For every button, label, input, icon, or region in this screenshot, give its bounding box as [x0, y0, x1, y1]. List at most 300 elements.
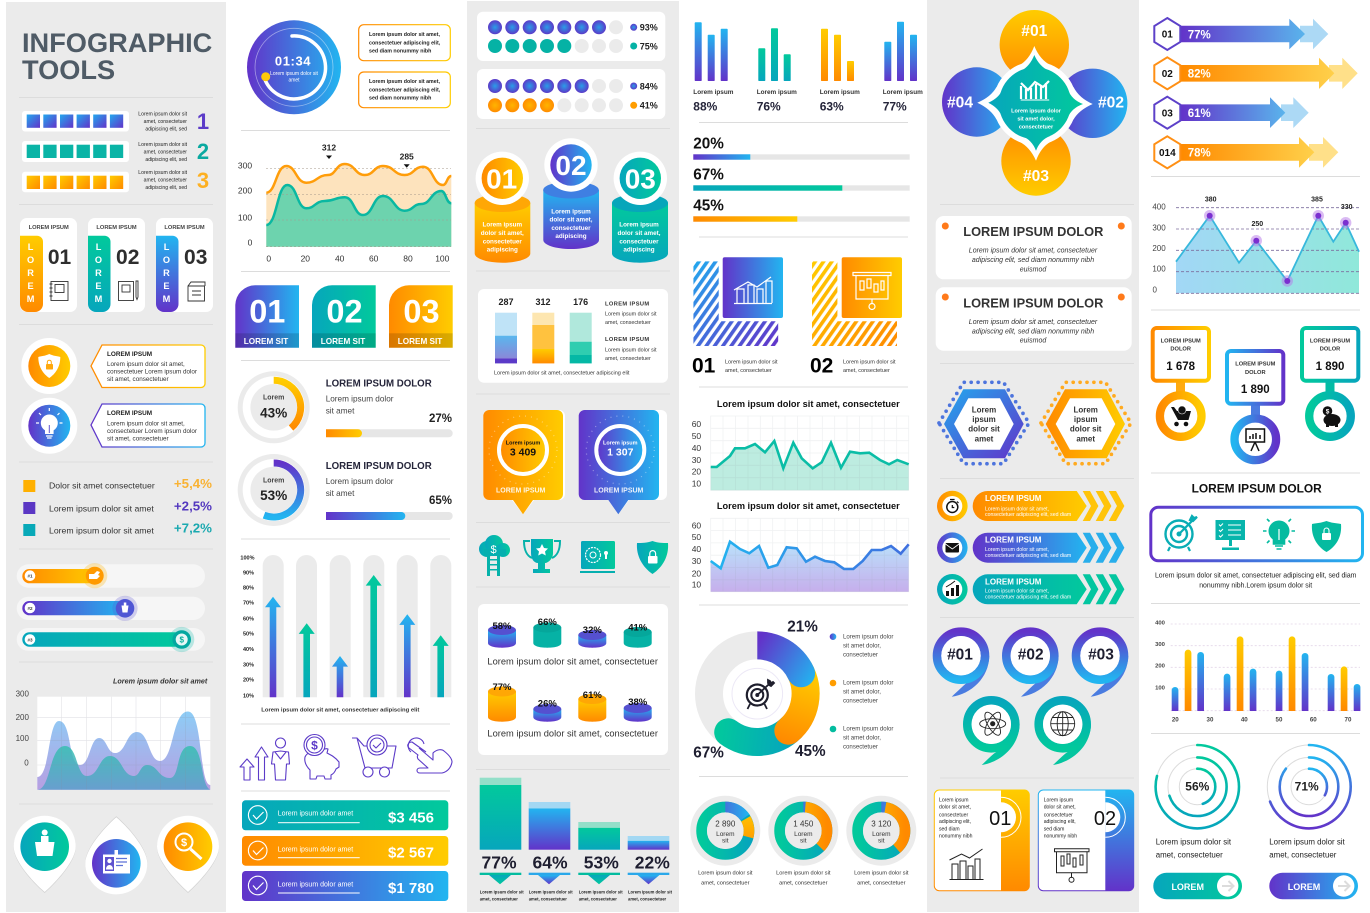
panel: numbered square rows: 3 [197, 168, 209, 193]
concentric progress 71%: 71% [1295, 779, 1319, 793]
panel: numbered square rows: Lorem ipsum dolor sit [138, 112, 188, 118]
line chart: teal: 30 [692, 455, 701, 465]
panel: LOREM cards: O [163, 255, 170, 265]
line area chart: orange and teal: 0 [248, 238, 253, 248]
pin icon: magnifier with dollar [157, 816, 219, 893]
panel: numbered square rows: 1 [197, 109, 209, 134]
progress ring 53% [238, 454, 310, 526]
panel: dot rating 84% 41%: 84% [640, 81, 658, 91]
slider bars: $ [179, 636, 184, 644]
panel: LOREM cards: R [163, 268, 170, 278]
panel: LOREM cards: M [27, 294, 35, 304]
arrow bar chart: 50% [243, 632, 254, 638]
mini bar set 76%: 76% [757, 99, 781, 113]
striped block 02: Lorem ipsum dolor sit [843, 360, 896, 366]
card: LOREM IPSUM DOLOR 1: euismod [1020, 266, 1047, 273]
panel: stacked bars 287 312 176 [478, 289, 668, 383]
icon strip panel [1151, 507, 1362, 561]
grouped bar chart: 400 [1155, 620, 1166, 626]
pin icon: id card [85, 816, 147, 894]
card: LOREM IPSUM DOLOR 1 [936, 216, 1132, 279]
bar chart 77 64 53 22: 22% [635, 852, 670, 872]
bar chart 77 64 53 22: 77% [481, 852, 517, 872]
arrow banner: teal [937, 574, 1124, 605]
callout: orange: Lorem ipsum dolor sit amet, [107, 361, 185, 368]
info card 02: Lorem ipsum [1044, 798, 1073, 804]
mini donut 1 450: Lorem ipsum dolor sit [776, 870, 831, 876]
pin box: 1 890 blue: DOLOR [1245, 370, 1266, 376]
concentric progress 71% [1267, 745, 1351, 860]
arrow banner: orange: Lorem ipsum dolor sit amet, [985, 506, 1049, 512]
badge: 1 307: Lorem ipsum [603, 441, 638, 447]
mini donut 2 890: amet, consectetuer [701, 880, 750, 886]
bar chart 77 64 53 22: Lorem ipsum dolor sit [628, 890, 673, 895]
grouped bar chart: 70 [1345, 716, 1352, 723]
caption text: nonummy nibh.Lorem ipsum dolor sit [1199, 583, 1312, 590]
arrow row 01 77%: 01 [1162, 30, 1173, 41]
arrow banner: blue: Lorem ipsum dolor sit amet, [985, 547, 1049, 553]
hexagon: blue: ipsum [972, 415, 996, 424]
badge: 3 409: LOREM IPSUM [496, 487, 546, 494]
donut chart with target icon: consectetuer [843, 698, 878, 705]
bar chart 77 64 53 22: amet, consectetuer [628, 896, 667, 901]
line chart: teal: Lorem ipsum dolor sit amet, consectetuer [717, 399, 900, 409]
concentric progress 71%: Lorem ipsum dolor sit [1269, 837, 1346, 846]
tab 03 [389, 285, 453, 348]
icon: piggy bank with coin outline: $ [311, 738, 318, 752]
icon: light bulb badge [21, 398, 77, 454]
speech bubble #03: #03 [1088, 647, 1114, 664]
callout: blue: Lorem ipsum dolor sit amet, [107, 420, 185, 428]
line chart: teal: 20 [692, 466, 701, 476]
cylinder badge 03: dolor sit amet, [617, 230, 661, 237]
panel: numbered square rows [22, 109, 209, 193]
cylinder badge 03: 03 [625, 163, 656, 194]
value row $1 780: $1 780 [388, 880, 434, 897]
info card 02: dolor sit amet, [1044, 805, 1076, 811]
progress bars 20 67 45: 45% [693, 198, 724, 215]
arrow banner: blue: consectetuer adipiscing elit, sed diam [985, 553, 1071, 559]
text box 1: Lorem ipsum dolor sit amet, [369, 32, 440, 38]
mini donut 1 450: 1 450 [793, 820, 814, 829]
arrow row 03 61%: 03 [1162, 108, 1173, 120]
arrow banner: blue: LOREM IPSUM [985, 536, 1042, 545]
mini bar set 88% [693, 22, 734, 113]
text and bar 27%: Lorem ipsum dolor [326, 395, 394, 404]
striped block 01: amet, consectetuer [725, 368, 772, 374]
donut chart with target icon: consectetuer [843, 651, 878, 658]
panel: cylinder percentages: Lorem ipsum dolor sit amet, consectetuer [487, 657, 658, 667]
value row $2 567: Lorem ipsum dolor amet [278, 846, 353, 853]
arrow banner: teal: LOREM IPSUM [985, 577, 1042, 586]
concentric progress 56%: 56% [1185, 779, 1210, 793]
info card 02 [1038, 790, 1134, 891]
info card 01 [934, 790, 1029, 891]
mini bar set 88%: Lorem ipsum [693, 89, 734, 96]
panel: stacked bars 287 312 176: 287 [498, 297, 514, 307]
panel: numbered square rows: adipiscing elit, sed [145, 157, 187, 163]
icon: pointing hand outline [408, 738, 452, 773]
badge: 1 307 [579, 410, 667, 514]
tab 03: LOREM SIT [398, 337, 442, 346]
line chart: teal: 40 [692, 443, 701, 453]
hexagon: blue: amet [975, 434, 994, 443]
slider bars: #3 [27, 637, 33, 642]
peak area chart: 385 [1311, 196, 1323, 203]
progress bars 20 67 45: 67% [693, 166, 724, 183]
cylinder badge 01: consectetuer [483, 238, 522, 245]
bar chart 77 64 53 22: amet, consectetuer [480, 896, 518, 901]
panel: LOREM cards: LOREM IPSUM [29, 225, 69, 231]
card: LOREM IPSUM DOLOR 2: adipiscing elit, sed diam nonummy nibh [972, 328, 1094, 335]
mini donut 1 450 [768, 796, 838, 886]
arrow banner: teal: Lorem ipsum dolor sit amet, [985, 588, 1049, 594]
arrow banner: orange: consectetuer adipiscing elit, sed diam [985, 512, 1071, 518]
four-petal diagram: #01 [1021, 23, 1048, 40]
panel: cylinder percentages: 58% [492, 621, 512, 632]
hexagon: orange: Lorem [1073, 405, 1098, 414]
panel: cylinder percentages: 66% [538, 617, 557, 628]
arrow bar chart: 40% [243, 647, 254, 653]
hexagon: blue [939, 382, 1029, 464]
panel: cylinder percentages: 77% [492, 682, 512, 693]
panel: stacked bars 287 312 176: amet, consectetuer [605, 320, 651, 326]
text and bar 65%: sit amet [326, 489, 355, 498]
pin box: 1 678: 1 678 [1166, 361, 1196, 373]
info card 01: dolor sit amet, [939, 805, 971, 811]
tab 02 [312, 285, 376, 348]
arrow bar chart: Lorem ipsum dolor sit amet, consectetuer adipiscing elit [261, 708, 419, 714]
panel: LOREM cards: O [27, 255, 34, 265]
grouped bar chart: 300 [1155, 642, 1166, 648]
timer circle: 01:34 [275, 54, 311, 69]
panel: numbered square rows: amet, consectetuer [144, 119, 187, 125]
striped block 02: 02 [810, 355, 833, 378]
progress bars 20 67 45 [693, 135, 910, 222]
pin icon: podium [14, 816, 76, 893]
panel: stacked bars 287 312 176: LOREM IPSUM [605, 301, 650, 307]
panel: numbered square rows: amet, consectetuer [144, 178, 187, 184]
icon: cloud money ladder: $ [490, 544, 497, 556]
panel: cylinder percentages [478, 604, 668, 755]
arrow banner: blue [937, 532, 1124, 563]
cylinder badge 01: adipiscing [487, 247, 518, 254]
panel: LOREM cards: LOREM IPSUM [96, 225, 137, 231]
four-petal diagram: #04 [947, 95, 973, 112]
donut chart with target icon: 45% [795, 743, 826, 760]
pin box: 1 890 blue: 1 890 [1241, 384, 1270, 396]
hexagon: orange: dolor sit [1070, 425, 1102, 434]
four-petal diagram: Lorem ipsum dolor [1011, 108, 1062, 114]
callout: blue [91, 404, 205, 447]
progress ring 53%: Lorem [263, 477, 284, 484]
arrow row 01 77%: 77% [1188, 29, 1211, 41]
speech bubble: atom [967, 700, 1020, 765]
four-petal diagram: #02 [1098, 95, 1124, 112]
mini bar set 88%: 88% [693, 99, 718, 113]
panel: LOREM cards: M [163, 294, 171, 304]
arrow row 01 77% [1154, 18, 1328, 50]
cylinder badge 01 [475, 152, 530, 263]
callout: blue: LOREM IPSUM [107, 410, 152, 417]
panel: cylinder percentages: Lorem ipsum dolor sit amet, consectetuer [487, 729, 658, 739]
mini donut 3 120: sit [878, 837, 885, 844]
panel: column 1 background [6, 2, 226, 912]
panel: LOREM cards: L [96, 242, 102, 252]
cylinder badge 02: adipiscing [555, 233, 587, 240]
line chart: blue: 10 [692, 580, 701, 590]
text box 2 [359, 72, 450, 108]
panel: stacked bars 287 312 176: Lorem ipsum dolor sit [605, 312, 657, 318]
line area chart: orange and teal [238, 143, 451, 263]
concentric progress 56%: amet, consectetuer [1156, 851, 1223, 860]
badge: 3 409: 3 409 [510, 446, 536, 458]
striped block 02 [810, 257, 902, 378]
mini donut 3 120: amet, consectetuer [857, 880, 906, 886]
icon: arrows and person outline [240, 738, 290, 780]
speech bubble #01 [937, 632, 989, 697]
arrow row 02 82%: 82% [1188, 69, 1211, 81]
mini donut 1 450: Lorem [794, 831, 813, 838]
panel: numbered square rows: amet, consectetuer [144, 150, 187, 156]
panel: LOREM cards: 02 [116, 246, 139, 269]
donut chart with target icon: 67% [693, 745, 724, 762]
bar chart 77 64 53 22: Lorem ipsum dolor sit [529, 890, 573, 895]
progress ring 43% [238, 371, 310, 443]
striped block 01 [692, 257, 783, 378]
panel: LOREM cards: E [95, 281, 102, 291]
mini bar set 76%: Lorem ipsum [757, 89, 797, 96]
panel: numbered square rows: 2 [197, 139, 209, 164]
button: teal LOREM [1153, 873, 1242, 899]
arrow row 014 78%: 014 [1159, 148, 1176, 159]
line area chart: orange and teal: 20 [301, 253, 310, 263]
info card 02: nonummy nibh [1044, 833, 1077, 839]
cylinder badge 01: dolor sit amet, [481, 230, 524, 237]
mini bar set 77%: 77% [883, 99, 907, 113]
panel: LOREM cards: M [95, 294, 103, 304]
text and bar 27% [326, 379, 453, 437]
text box 1: sed diam nonummy nibh [369, 49, 431, 55]
concentric progress 71%: amet, consectetuer [1269, 851, 1337, 860]
panel: LOREM cards [20, 218, 213, 312]
slider bars: #2 [27, 606, 33, 611]
info card 01: Lorem ipsum [939, 798, 968, 804]
panel: numbered square rows: adipiscing elit, sed [145, 126, 187, 132]
speech bubble: globe [1039, 700, 1091, 765]
callout: orange: sit amet, consectetuer [107, 376, 169, 383]
hexagon: orange: amet [1076, 434, 1095, 443]
card: LOREM IPSUM DOLOR 1: Lorem ipsum dolor sit amet, consectetuer [969, 248, 1098, 255]
line chart: blue: 40 [692, 544, 701, 554]
arrow banner: orange: LOREM IPSUM [985, 494, 1042, 503]
panel: stacked bars 287 312 176: LOREM IPSUM [605, 337, 650, 343]
arrow bar chart: 80% [243, 586, 254, 592]
cylinder badge 02: dolor sit amet, [549, 217, 593, 224]
pin icon: magnifier with dollar: $ [181, 837, 187, 849]
badge: 3 409 [483, 410, 565, 514]
legend with percentages: +2,5% [174, 499, 212, 514]
hexagon: blue: dolor sit [968, 425, 1000, 434]
donut chart with target icon: sit amet dolor, [843, 689, 881, 696]
panel: LOREM cards: 03 [184, 246, 207, 269]
mini donut 3 120 [846, 796, 916, 886]
icon: shield lock badge [21, 338, 77, 394]
legend with percentages [23, 476, 212, 536]
slider bars: #1 [27, 574, 33, 578]
mini bar set 76% [757, 28, 797, 113]
concentric progress 56% [1156, 745, 1239, 860]
grouped bar chart: 30 [1207, 716, 1214, 723]
panel: dot rating 84% 41% [477, 69, 665, 119]
arrow row 03 61%: 61% [1188, 108, 1211, 120]
card: LOREM IPSUM DOLOR 2 [936, 287, 1132, 351]
panel: dot rating 93% 75% [477, 12, 665, 61]
four-petal diagram: sit amet dolor, [1017, 117, 1055, 123]
value row $3 456: Lorem ipsum dolor amet [278, 811, 353, 818]
speech bubble #01: #01 [947, 647, 973, 664]
area chart: left column: 0 [24, 759, 29, 768]
icon: shield lock teal [637, 541, 668, 574]
pin box: 1 890 teal: 1 890 [1316, 361, 1344, 373]
panel: cylinder percentages: 26% [538, 699, 557, 710]
mini bar set 63%: 63% [820, 99, 844, 113]
mini bar set 77% [883, 22, 923, 113]
card: LOREM IPSUM DOLOR 2: LOREM IPSUM DOLOR [963, 295, 1103, 310]
line area chart: orange and teal: 80 [403, 253, 413, 263]
speech bubble #02 [1006, 632, 1059, 697]
timer circle [247, 20, 341, 114]
info card 01: adipiscing elit, [939, 819, 971, 825]
donut chart with target icon: 21% [787, 619, 818, 636]
legend with percentages: +7,2% [174, 521, 212, 536]
bar chart 77 64 53 22: Lorem ipsum dolor sit [579, 890, 623, 895]
cylinder badge 02: 02 [555, 150, 587, 181]
text box 1 [359, 25, 450, 61]
arrow bar chart: 20% [243, 678, 254, 684]
peak area chart: 200 [1152, 244, 1166, 253]
cylinder badge 01: 01 [486, 163, 517, 194]
tab 01 [235, 285, 299, 348]
panel: LOREM cards: L [28, 242, 34, 252]
striped block 02: amet, consectetuer [843, 368, 890, 374]
grouped bar chart: 100 [1155, 685, 1166, 691]
info card 02: adipiscing elit, [1044, 819, 1076, 825]
icon: trophy [524, 539, 560, 573]
mini donut 2 890 [690, 796, 760, 886]
arrow row 03 61% [1154, 97, 1309, 129]
text and bar 65%: LOREM IPSUM DOLOR [326, 461, 432, 472]
text and bar 27%: sit amet [326, 407, 355, 416]
panel: cylinder percentages: 38% [628, 697, 648, 708]
panel: column 5 background [927, 0, 1139, 912]
line chart: blue [692, 501, 909, 592]
panel: LOREM cards: E [163, 281, 170, 291]
card: LOREM IPSUM DOLOR 2: euismod [1020, 338, 1047, 345]
peak area chart [1152, 196, 1359, 295]
text box 2: consectetuer adipiscing elit, [369, 87, 441, 93]
four-petal diagram [942, 10, 1127, 196]
line area chart: orange and teal: 100 [435, 253, 450, 263]
tab 02: LOREM SIT [321, 337, 365, 346]
tab 01: 01 [249, 294, 285, 330]
mini donut 2 890: Lorem [716, 831, 735, 838]
peak area chart: 0 [1152, 286, 1157, 295]
bar chart 77 64 53 22: Lorem ipsum dolor sit [480, 890, 524, 895]
value row $1 780: Lorem ipsum dolor amet [278, 882, 353, 889]
panel: LOREM cards: E [28, 281, 34, 291]
line chart: teal: 50 [692, 431, 701, 441]
donut chart with target icon: consectetuer [843, 744, 878, 751]
arrow row 014 78%: 78% [1188, 148, 1211, 160]
heading: LOREM IPSUM DOLOR: LOREM IPSUM DOLOR [1192, 482, 1322, 496]
callout: orange: consectetuer Lorem ipsum dolor [107, 368, 197, 376]
mini donut 2 890: sit [722, 837, 729, 844]
caption text [1155, 572, 1357, 590]
arrow banner: orange [937, 491, 1124, 521]
text and bar 65%: 65% [429, 495, 452, 507]
panel: dot rating 93% 75%: 93% [640, 23, 658, 33]
panel: stacked bars 287 312 176: amet, consectetuer [605, 356, 651, 362]
progress bars 20 67 45: 20% [693, 135, 724, 152]
line chart: teal: 10 [692, 479, 701, 489]
text and bar 27%: 27% [429, 413, 452, 425]
donut chart with target icon [693, 619, 893, 762]
peak area chart: 250 [1251, 221, 1263, 228]
peak area chart: 380 [1205, 196, 1217, 203]
icon: safe [580, 541, 615, 573]
pin box: 1 890 teal [1302, 328, 1358, 437]
card: LOREM IPSUM DOLOR 2: Lorem ipsum dolor sit amet, consectetuer [969, 319, 1098, 326]
hexagon: blue: Lorem [972, 405, 996, 414]
panel: dot rating 93% 75%: 75% [640, 41, 658, 51]
pin box: 1 678: LOREM IPSUM [1161, 338, 1201, 344]
line chart: blue: Lorem ipsum dolor sit amet, consectetuer [717, 501, 900, 511]
pin box: 1 890 teal: LOREM IPSUM [1310, 338, 1350, 344]
grouped bar chart: 50 [1276, 716, 1283, 723]
grouped bar chart: 200 [1155, 664, 1166, 670]
mini donut 1 450: amet, consectetuer [779, 880, 828, 886]
arrow bar chart: 90% [243, 570, 254, 576]
line chart: blue: 20 [692, 568, 701, 578]
pin box: 1 890 blue [1227, 351, 1283, 460]
mini donut 3 120: Lorem [872, 831, 891, 838]
panel: numbered square rows: adipiscing elit, sed [145, 185, 187, 191]
peak area chart: 330 [1341, 204, 1353, 211]
value row $1 780 [242, 871, 448, 901]
pin box: 1 890 teal: DOLOR [1320, 347, 1340, 353]
panel: LOREM cards: R [95, 268, 102, 278]
panel: numbered square rows: Lorem ipsum dolor sit [138, 142, 188, 148]
bar chart 77 64 53 22: 53% [584, 852, 619, 872]
area chart: left column [16, 677, 210, 790]
callout: blue: consectetuer Lorem ipsum dolor [107, 428, 197, 435]
legend with percentages: Lorem ipsum dolor sit amet [49, 504, 154, 514]
progress ring 53%: 53% [260, 488, 287, 503]
badge: 1 307: LOREM IPSUM [594, 487, 644, 494]
panel: LOREM cards: R [27, 268, 34, 278]
peak area chart: 300 [1152, 223, 1166, 232]
peak area chart: 400 [1152, 202, 1166, 211]
cylinder badge 03: adipiscing [623, 247, 655, 254]
panel: LOREM cards: LOREM IPSUM [164, 225, 205, 231]
mini donut 2 890: Lorem ipsum dolor sit [698, 870, 753, 876]
panel: cylinder percentages: 41% [628, 623, 648, 634]
text box 2: sed diam nonummy nibh [369, 95, 431, 101]
concentric progress 56%: Lorem ipsum dolor sit [1156, 837, 1232, 846]
button: blue LOREM: LOREM [1288, 882, 1320, 892]
mini bar set 63% [820, 29, 860, 113]
